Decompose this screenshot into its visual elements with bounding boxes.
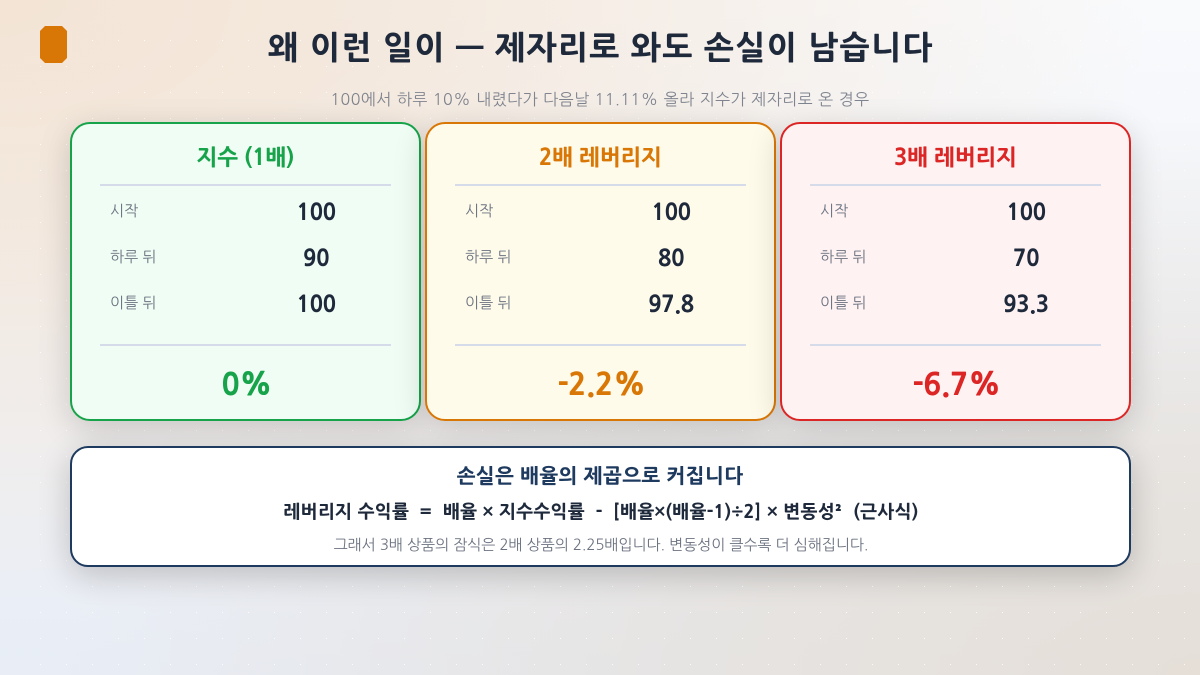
row: one day later: 하루 뒤 <box>110 250 157 265</box>
value: one day later: 90 <box>303 248 329 270</box>
heading: index: 지수 (1배) <box>197 147 294 169</box>
panel: index 1x <box>70 122 421 421</box>
row: one day later: 하루 뒤 <box>820 250 867 265</box>
panel: formula callout <box>70 446 1131 567</box>
row: two days later: 이틀 뒤 <box>465 296 512 311</box>
subtitle: 100에서 하루 10% 내렸다가 다음날 11.11% 올라 지수가 제자리로 온 경우 <box>330 92 870 108</box>
value: one day later: 80 <box>658 248 684 270</box>
value: start: 100 <box>296 202 336 224</box>
value: two days later: 93.3 <box>1003 294 1049 316</box>
panel: 2x leverage <box>425 122 776 421</box>
value: start: 100 <box>1006 202 1046 224</box>
row: two days later: 이틀 뒤 <box>110 296 157 311</box>
result: -6.7%: -6.7% <box>912 370 1001 400</box>
row: start: 시작 <box>820 204 848 219</box>
value: two days later: 97.8 <box>648 294 694 316</box>
row: start: 시작 <box>465 204 493 219</box>
result: -2.2%: -2.2% <box>557 370 646 400</box>
row: one day later: 하루 뒤 <box>465 250 512 265</box>
value: start: 100 <box>651 202 691 224</box>
value: one day later: 70 <box>1013 248 1039 270</box>
heading: 3x: 3배 레버리지 <box>894 147 1017 169</box>
row: two days later: 이틀 뒤 <box>820 296 867 311</box>
formula: 레버리지 수익률 = 배율 × 지수수익률 - [배율×(배율-1)÷2] × 변동성² (근사식) <box>283 503 919 521</box>
result: 0%: 0% <box>221 370 272 400</box>
value: two days later: 100 <box>296 294 336 316</box>
heading: 2x: 2배 레버리지 <box>539 147 662 169</box>
explanatory note: 그래서 3배 상품의 잠식은 2배 상품의 2.25배입니다. 변동성이 클수록 더 심해집니다. <box>334 538 868 553</box>
icon: orange badge <box>40 26 67 63</box>
row: start: 시작 <box>110 204 138 219</box>
panel: 3x leverage <box>780 122 1131 421</box>
callout heading: 손실은 배율의 제곱으로 커집니다 <box>457 466 743 486</box>
title: 왜 이런 일이 — 제자리로 와도 손실이 남습니다 <box>268 32 934 64</box>
